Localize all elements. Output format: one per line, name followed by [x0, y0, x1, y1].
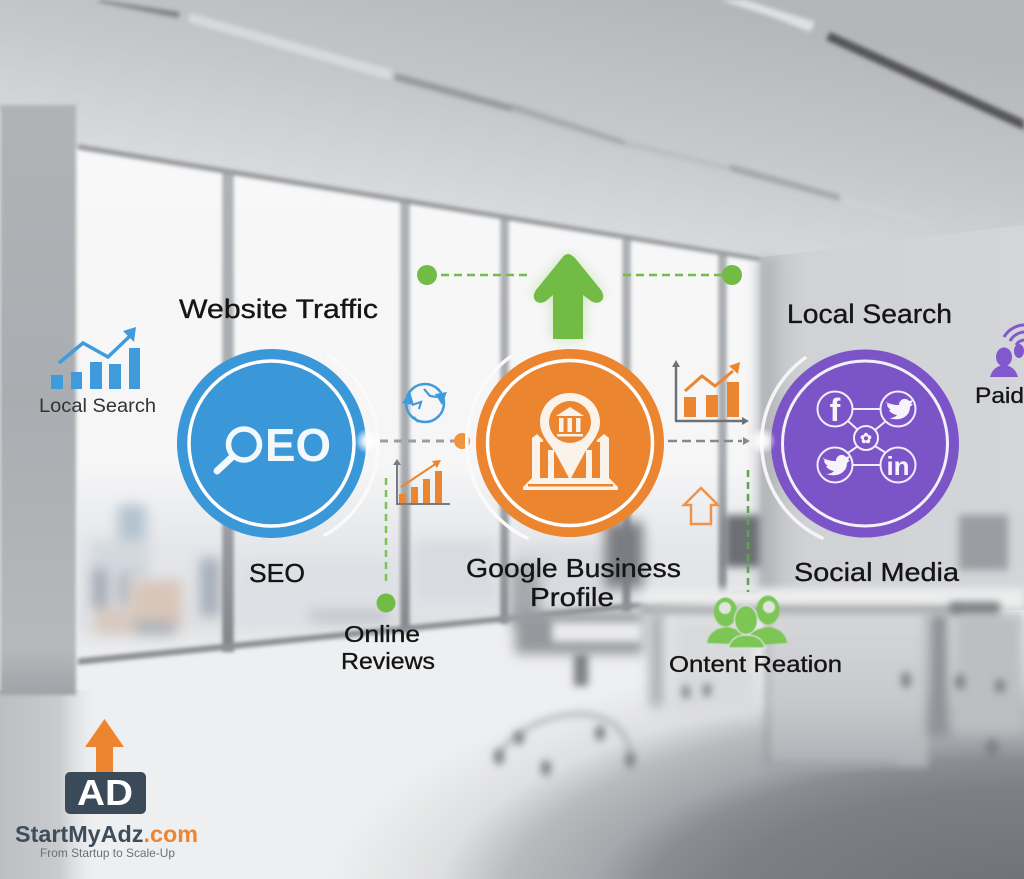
panel: Google Business Profile circle: [467, 349, 664, 538]
connector lines: [376, 433, 750, 612]
icon: magnifier and EO letters: [217, 419, 331, 471]
label: Online Reviews: Reviews: [341, 648, 435, 674]
icon: logo arrow: [85, 719, 124, 772]
label: Online Reviews: [341, 621, 435, 674]
icon: orange outline arrow: [684, 488, 718, 524]
icon: purple person with signal: [990, 325, 1024, 377]
label: Ontent Reation: Ontent Reation: [669, 651, 842, 677]
label: Google Business Profile: Google Business: [466, 553, 681, 583]
logo wordmark: StartMyAdz.com: [15, 821, 198, 847]
icon: globe with arrows: [402, 384, 447, 422]
icon: small orange bar chart: [393, 459, 450, 504]
icon: orange growth chart: [672, 360, 749, 425]
label: Local Search small: Local Search: [39, 396, 156, 417]
city haze: [90, 505, 615, 635]
icon: social network hub: in: [886, 451, 910, 481]
heading: Local Search: Local Search: [787, 299, 952, 329]
window frame: [78, 144, 776, 665]
logo tagline: From Startup to Scale-Up: [40, 846, 175, 860]
icon: magnifier and EO letters: EO: [265, 419, 331, 471]
label: SEO: SEO: [249, 558, 305, 588]
panel: Social Media circle: [762, 350, 959, 538]
logo: StartMyAdz: [15, 719, 198, 860]
label: Online Reviews: Online: [344, 621, 420, 647]
label: Google Business Profile: Profile: [530, 582, 614, 612]
icon: social network hub: [818, 392, 916, 482]
panel: SEO circle: [177, 349, 378, 538]
ceiling tracks: [98, 0, 1024, 226]
icon: social network hub: f: [830, 392, 841, 428]
icon: green up arrow: [530, 254, 606, 339]
label: Social Media: Social Media: [794, 557, 960, 587]
heading: Website Traffic: Website Traffic: [179, 294, 378, 324]
icon: green people group: [707, 596, 787, 648]
icon: social network hub: ✿: [860, 430, 872, 446]
icon: blue rising chart: [51, 327, 140, 389]
green top connector: [417, 265, 742, 285]
column: [0, 105, 76, 695]
label: Paid: Paid: [975, 383, 1024, 408]
logo badge: [65, 772, 146, 814]
logo badge: AD: [77, 772, 133, 813]
desk, panels and chair: [494, 515, 1024, 776]
label: Google Business Profile: [466, 553, 681, 612]
icon: location pin over buildings: [523, 393, 618, 490]
